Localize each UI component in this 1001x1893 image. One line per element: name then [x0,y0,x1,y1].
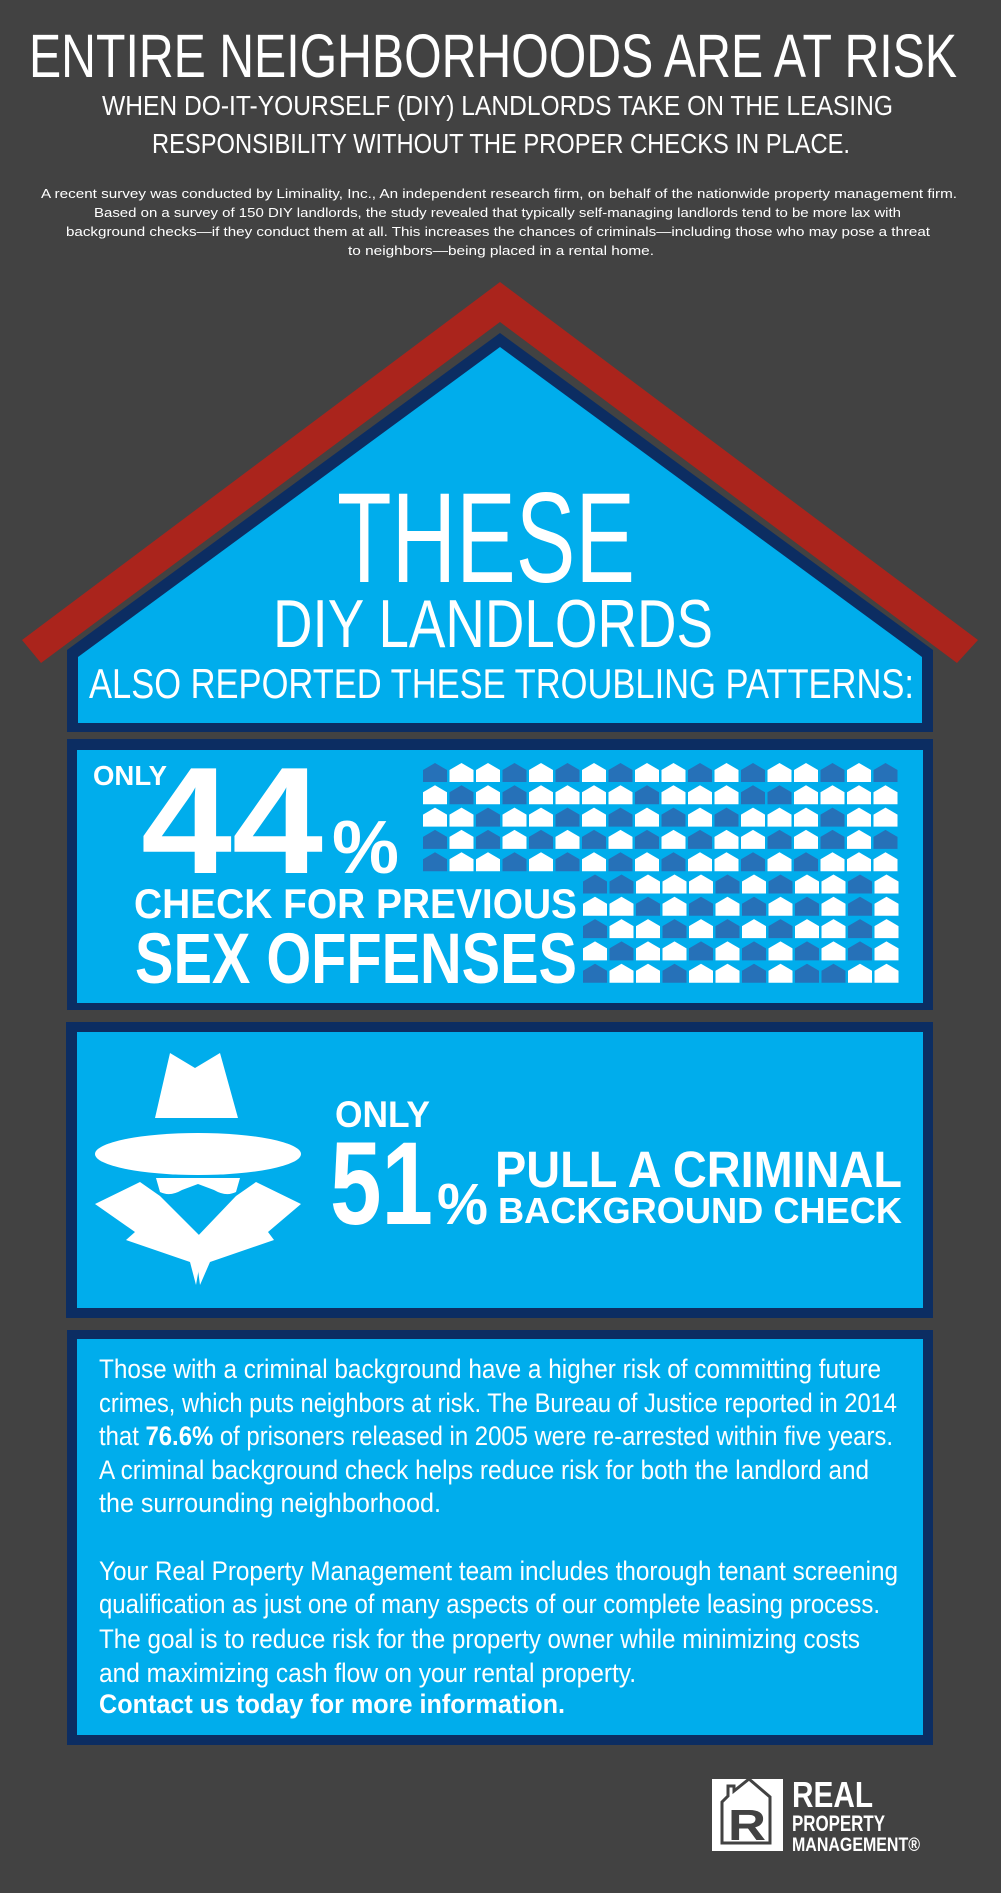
stat: only 51%: ONLY [335,1094,430,1135]
stat: only 44%: ONLY [93,760,167,791]
stat: only 51%: % [437,1172,488,1237]
heading: DIY LANDLORDS: DIY LANDLORDS [273,586,713,662]
heading: THESE: THESE [337,467,635,610]
paragraph: real property management [99,1556,898,1719]
panel: 51% criminal background [66,1022,933,1318]
paragraph: real property management: qualification as just one of many aspects of our complete leasing process. [99,1589,880,1619]
intro text: to neighbors—being placed in a rental home. [348,243,654,258]
intro text: A recent survey was conducted by Liminality, Inc., An independent research firm, on behalf of the nationwide property management firm. [41,186,957,201]
stat label [495,1141,902,1231]
roof [22,282,978,663]
paragraph: real property management: Your Real Property Management team includes thorough tenant screening [99,1556,898,1586]
paragraph: criminal risk: crimes, which puts neighbors at risk. The Bureau of Justice reported in 2014 [99,1388,897,1418]
intro text [41,186,957,258]
logo: R [728,1801,766,1850]
logo [712,1774,920,1856]
panel: 44% sex offenses [67,736,933,1010]
icon grid: houses [423,763,898,983]
stat: only 44%: % [332,805,399,889]
paragraph: criminal risk: A criminal background check helps reduce risk for both the landlord and [99,1455,869,1485]
logo: REAL [792,1774,873,1815]
stat label [134,880,577,999]
paragraph: criminal risk: Those with a criminal background have a higher risk of committing future [99,1354,881,1384]
subtitle: RESPONSIBILITY WITHOUT THE PROPER CHECKS IN PLACE. [152,128,850,159]
stat label: CHECK FOR PREVIOUS [134,880,577,927]
logo: PROPERTY [792,1811,885,1836]
stat: only 51%: 51 [330,1118,433,1250]
paragraph: criminal risk: the surrounding neighborhood. [99,1488,441,1518]
stat label: BACKGROUND CHECK [498,1190,902,1231]
panel: explanation text [67,1330,933,1745]
subtitle: WHEN DO-IT-YOURSELF (DIY) LANDLORDS TAKE ON THE LEASING [102,90,893,121]
paragraph: criminal risk: that 76.6% of prisoners released in 2005 were re-arrested within five years. [99,1421,893,1451]
stat label: PULL A CRIMINAL [495,1141,902,1198]
stat label: SEX OFFENSES [135,920,577,999]
paragraph: criminal risk [99,1354,897,1518]
paragraph: real property management: The goal is to reduce risk for the property owner while minimizing costs [99,1624,860,1654]
paragraph: real property management: Contact us today for more information. [99,1689,565,1719]
logo: MANAGEMENT® [792,1835,920,1856]
intro text: background checks—if they conduct them at all. This increases the chances of criminals—including those who may pose a threat [66,224,930,239]
house header panel [67,333,933,732]
stat: only 44%: 44 [141,736,323,906]
stat: only 44% [93,736,399,906]
icon: spy [95,1053,301,1285]
paragraph: real property management: and maximizing cash flow on your rental property. [99,1658,636,1688]
subtitle [102,90,893,159]
intro text: Based on a survey of 150 DIY landlords, the study revealed that typically self-managing landlords tend to be more lax with [94,205,901,220]
